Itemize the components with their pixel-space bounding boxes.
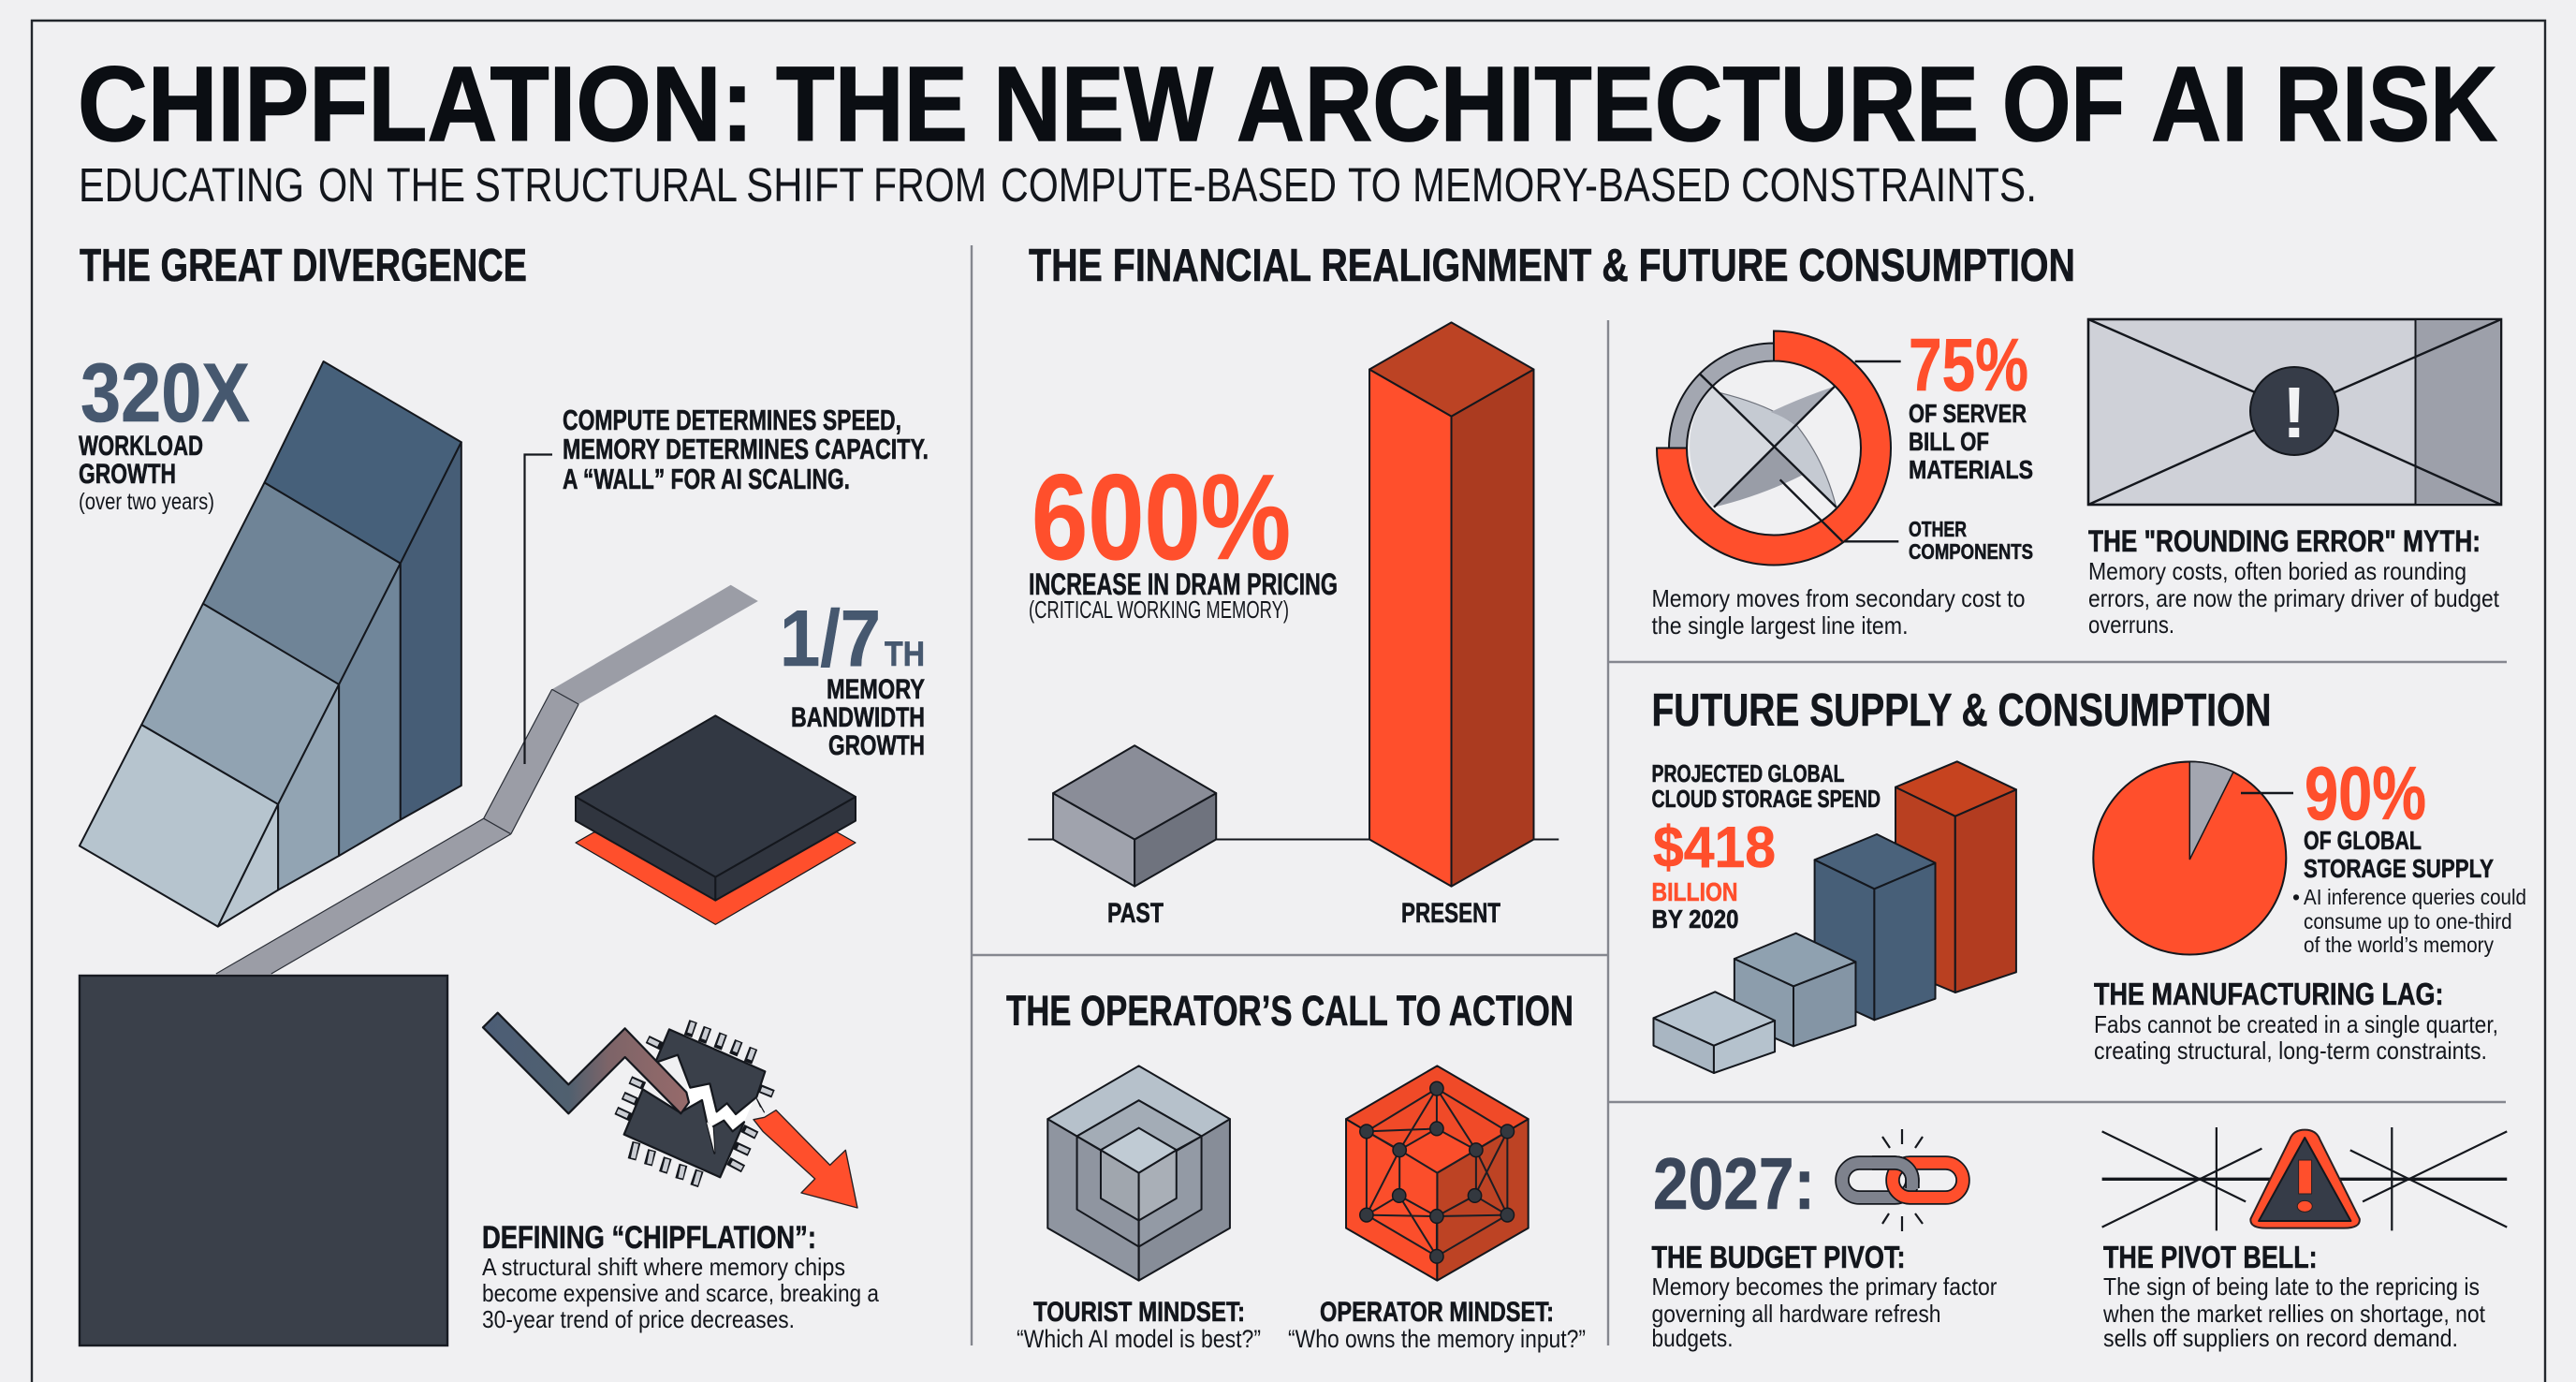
- text: defining chipflation: DEFINING “CHIPFLATION”:: [482, 1220, 816, 1256]
- stat: 1/7th memory bandwidth growth: BANDWIDTH: [791, 702, 925, 733]
- stat: 1/7th memory bandwidth growth: [780, 595, 925, 761]
- subtitle: THE: [387, 158, 465, 212]
- callout: compute vs memory: A “WALL” FOR AI SCALING.: [563, 463, 850, 495]
- text: rounding error myth: errors, are now the primary driver of budget: [2088, 584, 2500, 612]
- subtitle: EDUCATING: [79, 158, 304, 212]
- callout: compute vs memory: [524, 404, 929, 764]
- subtitle: SHIFT: [746, 158, 864, 212]
- chart: stepped workload growth block: [80, 361, 461, 927]
- stat: 600 percent: INCREASE IN DRAM PRICING: [1029, 567, 1338, 601]
- text: defining chipflation: 30-year trend of price decreases.: [482, 1305, 795, 1333]
- stat: $418 billion: $418: [1653, 816, 1776, 880]
- panel: the great divergence: [79, 241, 929, 1345]
- title: CHIPFLATION:: [78, 45, 754, 163]
- text: defining chipflation: A structural shift where memory chips: [482, 1253, 845, 1281]
- text: rounding error myth: THE "ROUNDING ERROR" MYTH:: [2088, 524, 2481, 558]
- stat: 1/7th memory bandwidth growth: TH: [885, 635, 925, 673]
- panel: dram pricing chart: [1028, 322, 1559, 929]
- stat: 90 percent of global storage supply: of the world’s memory: [2304, 933, 2494, 957]
- text: manufacturing lag: Fabs cannot be created in a single quarter,: [2094, 1010, 2498, 1038]
- icon: nested tourist cube: [1047, 1066, 1230, 1281]
- stat: 600 percent: 600%: [1032, 448, 1291, 585]
- stat: 75 percent of server bill of materials: OF SERVER: [1909, 399, 2027, 428]
- stat: 1/7th memory bandwidth growth: MEMORY: [827, 674, 925, 705]
- text: rounding error myth: Memory costs, often boried as rounding: [2088, 557, 2466, 585]
- text: defining chipflation: [482, 1220, 879, 1333]
- text: tourist mindset: [1017, 1297, 1261, 1353]
- heading: future supply: FUTURE SUPPLY & CONSUMPTION: [1651, 685, 2271, 736]
- bar chart: isometric cloud spend bars: [1653, 761, 2016, 1073]
- stat: 75 percent of server bill of materials: 75%: [1909, 323, 2028, 406]
- stat: 320x workload growth: GROWTH: [79, 459, 176, 490]
- stat: 90 percent of global storage supply: STORAGE SUPPLY: [2304, 854, 2494, 883]
- stat: 90 percent of global storage supply: •: [2292, 885, 2300, 909]
- dark wall block: [80, 976, 447, 1345]
- subtitle: STRUCTURAL: [475, 158, 738, 212]
- icon: envelope with warning seal: [2088, 319, 2501, 505]
- panel: budget pivot: [1651, 1129, 1998, 1352]
- title: AI: [2151, 45, 2248, 163]
- heading: the great divergence: THE GREAT DIVERGENCE: [80, 241, 527, 291]
- stat: 600 percent: (CRITICAL WORKING MEMORY): [1029, 595, 1289, 624]
- text: pivot bell: [2102, 1240, 2486, 1352]
- label: other components: [1909, 517, 2033, 564]
- stat: $418 billion: [1651, 759, 1881, 934]
- title: NEW: [993, 45, 1213, 163]
- text: rounding error myth: [2088, 524, 2500, 639]
- text: budget pivot: budgets.: [1651, 1324, 1734, 1352]
- text: pivot bell: when the market rellies on shortage, not: [2102, 1300, 2486, 1328]
- stat: 1/7th memory bandwidth growth: GROWTH: [828, 730, 925, 761]
- subtitle: COMPUTE-BASED: [1001, 158, 1337, 212]
- callout: compute vs memory: MEMORY DETERMINES CAPACITY.: [563, 433, 929, 465]
- stat: 75 percent of server bill of materials: BILL OF: [1909, 427, 1989, 456]
- axis label: present: PRESENT: [1401, 898, 1500, 929]
- text: manufacturing lag: creating structural, long-term constraints.: [2094, 1036, 2487, 1065]
- stat: $418 billion: BY 2020: [1651, 904, 1739, 934]
- text: budget pivot: Memory becomes the primary factor: [1651, 1272, 1998, 1301]
- stat: 75 percent of server bill of materials: [1909, 323, 2033, 484]
- chart: donut 75 percent: [1657, 331, 1901, 566]
- text: pivot bell: The sign of being late to the repricing is: [2103, 1272, 2480, 1301]
- subtitle: TO: [1348, 158, 1401, 212]
- subtitle: FROM: [873, 158, 987, 212]
- text: tourist mindset: “Which AI model is best?”: [1017, 1325, 1261, 1353]
- icon: warning triangle with crossed lines: [2102, 1127, 2507, 1230]
- heading: financial realignment: THE FINANCIAL REALIGNMENT & FUTURE CONSUMPTION: [1029, 241, 2075, 291]
- title: THE: [776, 45, 968, 163]
- stat: $418 billion: CLOUD STORAGE SPEND: [1651, 785, 1881, 813]
- text: operator mindset: OPERATOR MINDSET:: [1320, 1297, 1554, 1328]
- chart: 90 percent pie: [2093, 761, 2293, 955]
- label: other components: COMPONENTS: [1909, 539, 2033, 564]
- icon: memory slab: [576, 715, 856, 924]
- panel: pivot bell: [2102, 1127, 2507, 1352]
- text: budget pivot: governing all hardware refresh: [1651, 1300, 1941, 1328]
- bar chart: past vs present: [1028, 322, 1559, 887]
- text: operator mindset: “Who owns the memory input?”: [1288, 1325, 1586, 1353]
- stat: 90 percent of global storage supply: OF GLOBAL: [2304, 826, 2422, 855]
- stat: $418 billion: PROJECTED GLOBAL: [1651, 759, 1845, 787]
- subtitle: [79, 158, 2037, 212]
- stat: 1/7th memory bandwidth growth: 1/7: [780, 595, 881, 684]
- stat: 320x workload growth: (over two years): [79, 489, 214, 515]
- panel: server bill of materials: [1651, 319, 2501, 640]
- subtitle: CONSTRAINTS.: [1741, 158, 2037, 212]
- stat: 90 percent of global storage supply: AI inference queries could: [2304, 885, 2526, 909]
- stat: 2027: 2027:: [1653, 1142, 1815, 1225]
- stat: 75 percent of server bill of materials: MATERIALS: [1909, 455, 2033, 484]
- callout: compute vs memory: COMPUTE DETERMINES SPEED,: [563, 404, 901, 436]
- text: memory moves: [1651, 584, 2026, 640]
- icon: networked operator cube: [1346, 1066, 1529, 1281]
- text: defining chipflation: become expensive and scarce, breaking a: [482, 1279, 879, 1307]
- text: manufacturing lag: [2094, 977, 2498, 1065]
- subtitle: ON: [318, 158, 374, 212]
- text: memory moves: Memory moves from secondary cost to: [1651, 584, 2026, 612]
- title: ARCHITECTURE: [1237, 45, 1979, 163]
- title: RISK: [2275, 45, 2497, 163]
- icon: envelope with warning seal: !: [2282, 373, 2306, 453]
- text: manufacturing lag: THE MANUFACTURING LAG:: [2094, 977, 2443, 1011]
- stat: 320x workload growth: [79, 346, 250, 515]
- text: tourist mindset: TOURIST MINDSET:: [1033, 1297, 1245, 1328]
- stat: 90 percent of global storage supply: [2292, 752, 2526, 957]
- panel: future supply and consumption: [1651, 685, 2526, 1073]
- text: memory moves: the single largest line item.: [1651, 611, 1908, 640]
- text: pivot bell: sells off suppliers on record demand.: [2103, 1324, 2458, 1352]
- label: other components: OTHER: [1909, 517, 1967, 541]
- heading: call to action: THE OPERATOR’S CALL TO ACTION: [1006, 987, 1573, 1035]
- text: pivot bell: THE PIVOT BELL:: [2103, 1240, 2318, 1274]
- stat: $418 billion: BILLION: [1651, 877, 1737, 906]
- title: [78, 45, 2497, 163]
- panel: operator's call to action: [1006, 987, 1586, 1353]
- text: rounding error myth: overruns.: [2088, 610, 2174, 639]
- stat: 320x workload growth: 320X: [80, 346, 250, 439]
- text: budget pivot: THE BUDGET PIVOT:: [1651, 1240, 1906, 1274]
- stat: 320x workload growth: WORKLOAD: [79, 431, 203, 462]
- axis label: past: PAST: [1107, 898, 1164, 929]
- text: operator mindset: [1288, 1297, 1586, 1353]
- memory bandwidth road: [216, 585, 758, 975]
- stat: 90 percent of global storage supply: 90%: [2305, 752, 2426, 836]
- subtitle: MEMORY-BASED: [1412, 158, 1731, 212]
- title: OF: [2002, 45, 2125, 163]
- icon: broken chip and falling price arrow: [483, 1013, 857, 1208]
- text: budget pivot: [1651, 1240, 1998, 1352]
- icon: breaking chain link: [1842, 1129, 1963, 1231]
- stat: 90 percent of global storage supply: consume up to one-third: [2304, 909, 2512, 934]
